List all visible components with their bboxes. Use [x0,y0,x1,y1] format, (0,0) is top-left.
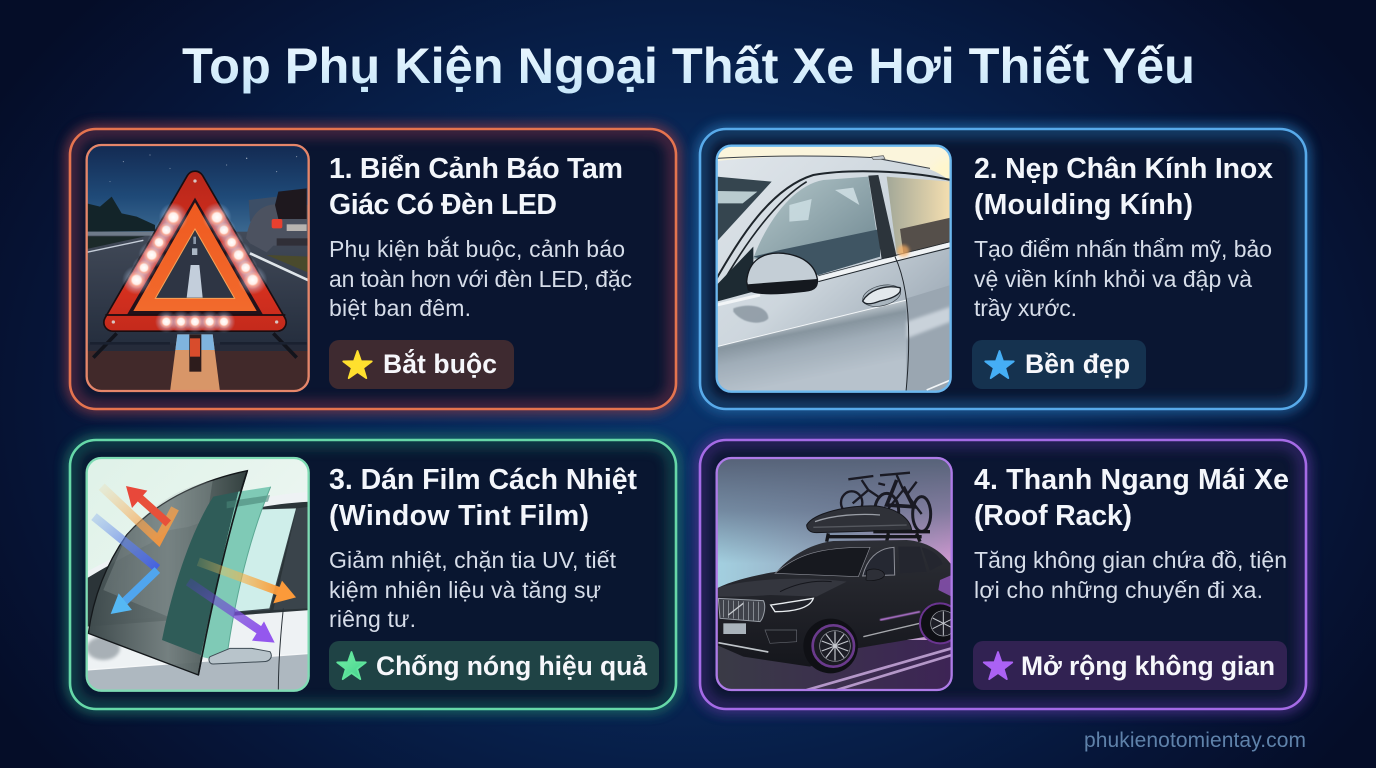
roof rack [827,532,930,542]
image: warning triangle at night [86,144,310,392]
heading: (Roof Rack) [974,500,1132,532]
description [329,547,617,632]
description: vệ viền kính khỏi va đập và [974,266,1252,292]
green film [201,487,271,663]
panel: card 1 warning triangle [69,128,677,410]
description: trầy xước. [974,295,1077,321]
asphalt [88,345,308,351]
heading: 2. Nẹp Chân Kính Inox [974,153,1273,185]
icon: mirror [747,253,817,294]
description: Giảm nhiệt, chặn tia UV, tiết [329,547,617,573]
lower door shading [717,300,907,392]
description: Phụ kiện bắt buộc, cảnh báo [329,236,625,262]
icon: star [343,351,372,378]
car body [717,540,952,667]
dark film [88,471,247,675]
panel: card 4 roof rack [699,439,1307,710]
arrow: purple ray [188,582,262,632]
description [974,547,1287,603]
triangle [113,180,277,322]
description: Tăng không gian chứa đồ, tiện [974,547,1287,573]
headlight [771,598,813,612]
footer website: phukienotomientay.com [1084,729,1306,752]
icon: star [985,351,1014,378]
heading: (Moulding Kính) [974,189,1193,221]
rear wheel [919,602,950,644]
door handle [862,284,901,307]
front wheel [803,619,858,673]
badge [973,641,1287,690]
badge: Bền đẹp [1025,349,1130,379]
roof box [807,506,912,533]
panel: card 2 window moulding [699,128,1307,410]
heading: 3. Dán Film Cách Nhiệt [329,464,638,496]
arrow: orange ray reflecting red [102,487,175,540]
arrow: yellow-orange ray [198,562,280,592]
image: window tint layers with arrows [86,456,310,692]
heading [974,153,1273,221]
description: Tạo điểm nhấn thẩm mỹ, bảo [974,236,1272,262]
heading: Giác Có Đèn LED [329,189,557,221]
door handle [209,648,271,664]
description [974,236,1272,321]
heading: 4. Thanh Ngang Mái Xe [974,464,1289,496]
title: Top Phụ Kiện Ngoại Thất Xe Hơi Thiết Yếu [182,37,1195,94]
description: biệt ban đêm. [329,295,471,321]
mirror [866,569,885,581]
description [329,236,632,321]
badge [972,340,1146,389]
panel: card 3 window tint film [69,439,677,710]
badge: Mở rộng không gian [1021,651,1275,681]
icon: star [984,652,1012,679]
badge [329,641,659,690]
car body [88,560,110,578]
heading [329,464,638,532]
arrow: blue ray [94,517,157,568]
description: riêng tư. [329,606,416,632]
bikes [841,473,931,531]
description: an toàn hơn với đèn LED, đặc [329,266,632,292]
heading [974,464,1289,532]
badge: Bắt buộc [383,349,497,379]
heading: 1. Biển Cảnh Báo Tam [329,153,623,185]
description: kiệm nhiên liệu và tăng sự [329,577,601,603]
image: SUV with roof rack [716,456,953,692]
grille [718,598,765,622]
icon: star [337,652,366,679]
heading: (Window Tint Film) [329,500,589,532]
badge: Chống nóng hiệu quả [376,651,647,681]
badge [329,340,514,389]
windows [775,547,870,577]
heading [329,153,623,221]
image: car door with chrome moulding [716,144,952,393]
description: lợi cho những chuyến đi xa. [974,577,1263,603]
LED lights [122,203,267,333]
